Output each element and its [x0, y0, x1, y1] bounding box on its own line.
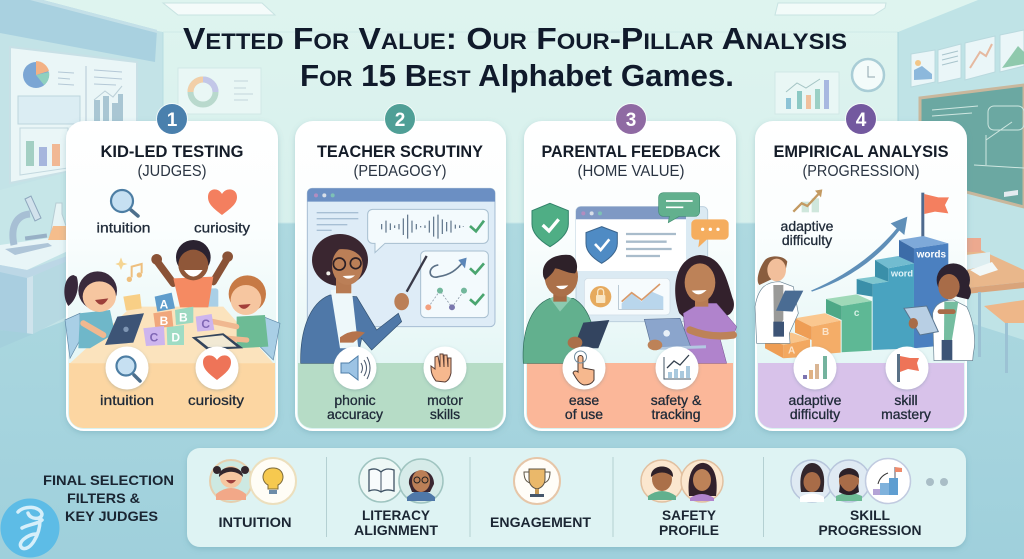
icon: speaker: [334, 346, 376, 390]
counter with microscope and flask: [0, 172, 70, 348]
staircase: B: [822, 327, 829, 338]
title: For 15 Best Alphabet Games.: [300, 58, 734, 93]
label: skill mastery: mastery: [881, 406, 931, 422]
label: intuition bottom: intuition: [100, 392, 154, 408]
scientist left: [755, 256, 803, 343]
speech bubbles: [659, 193, 729, 247]
panel 4: empirical analysis: [755, 103, 975, 430]
filter: safety profile: PROFILE: [659, 522, 719, 538]
mother with laptop: [644, 255, 737, 363]
teacher desk and chair: [966, 238, 1024, 373]
number badge 2: [384, 103, 416, 135]
chalkboard: [920, 85, 1024, 207]
filter: literacy alignment: ALIGNMENT: [354, 522, 438, 538]
colour band 4: [758, 363, 964, 428]
staircase: [765, 236, 948, 358]
final selection label: KEY JUDGES: [65, 508, 158, 524]
icon: magnifier top: [111, 190, 138, 216]
heading 2: TEACHER SCRUTINY: [317, 143, 483, 161]
number badge 2: 2: [395, 110, 405, 131]
label: skill mastery: skill: [894, 392, 918, 408]
centre child: [151, 240, 233, 307]
arrow: [811, 217, 907, 292]
icon: heart bottom: [196, 346, 238, 390]
label: adaptive difficulty top: difficulty: [782, 232, 832, 248]
panel 1: kid-led testing: [64, 103, 280, 430]
filter: intuition: INTUITION: [218, 514, 292, 530]
colour band 1: [69, 363, 275, 428]
heading 3: (HOME VALUE): [578, 163, 684, 180]
heading 3: [542, 143, 721, 180]
filter: safety profile: SAFETY: [662, 507, 717, 523]
filter: safety profile: [641, 460, 723, 538]
icon: pointer hand: [562, 346, 606, 390]
staircase: words: [916, 249, 946, 260]
boy with tablet: [192, 275, 268, 350]
title: [183, 21, 847, 93]
icon: rising chart: [656, 346, 698, 390]
title: Vetted For Value: Our Four-Pillar Analysis: [183, 21, 847, 56]
heading 1: [100, 143, 244, 180]
alphabet blocks: A: [160, 297, 169, 311]
label: motor skills: skills: [430, 406, 460, 422]
label: curiosity top: curiosity: [194, 220, 250, 236]
panel 3: parental feedback: [523, 103, 737, 430]
sparkle and music note: [115, 257, 142, 282]
filter: skill progression: SKILL: [850, 507, 890, 523]
filter: skill progression: [791, 458, 948, 538]
green shield: [532, 203, 568, 247]
number badge 3: [615, 103, 647, 135]
heading 3: PARENTAL FEEDBACK: [542, 143, 721, 161]
heading 4: [774, 143, 948, 180]
staircase: c: [854, 308, 860, 319]
girl with tablet: [64, 271, 144, 348]
whiteboard left: [10, 47, 137, 183]
icon: magnifier bottom: [106, 346, 148, 390]
illustration: kids at a table with blocks: [64, 240, 280, 363]
label: safety and tracking: tracking: [651, 406, 701, 422]
icon: small rising arrow: [793, 189, 822, 212]
progress panel with checks: [421, 251, 488, 318]
dashboard window: [576, 207, 708, 322]
label: ease of use: of use: [565, 406, 603, 422]
final selection label: [43, 472, 174, 524]
filter: skill progression: PROGRESSION: [818, 522, 922, 538]
alphabet blocks: D: [171, 330, 180, 344]
filter: engagement: [490, 458, 591, 530]
alphabet blocks: C: [201, 317, 210, 331]
speech bubble with waveform: [368, 209, 488, 253]
icon: flag: [886, 346, 928, 390]
number badge 1: [156, 103, 188, 135]
father with tablet: [523, 255, 609, 363]
label: phonic accuracy: accuracy: [327, 406, 383, 422]
label: adaptive difficulty bottom: [789, 392, 842, 422]
label: ease of use: ease: [569, 392, 599, 408]
label: motor skills: [427, 392, 463, 422]
label: safety and tracking: safety &: [651, 392, 702, 408]
label: adaptive difficulty top: [781, 218, 834, 248]
heading 2: (PEDAGOGY): [354, 163, 446, 180]
filter: literacy alignment: [354, 458, 443, 538]
alphabet blocks: B: [179, 311, 188, 325]
label: motor skills: motor: [427, 392, 463, 408]
number badge 1: 1: [167, 110, 178, 131]
number badge 4: [845, 103, 877, 135]
number badge 4: 4: [856, 110, 867, 131]
label: phonic accuracy: phonic: [334, 392, 376, 408]
logo: [0, 498, 60, 558]
ceiling light right: [775, 3, 886, 15]
label: phonic accuracy: [327, 392, 383, 422]
illustration: progression staircase with scientists: [755, 193, 975, 361]
label: ease of use: [565, 392, 603, 422]
staircase: A: [788, 345, 795, 356]
label: curiosity bottom: curiosity: [188, 392, 244, 408]
heading 2: [317, 143, 483, 180]
label: skill mastery: [881, 392, 931, 422]
label: intuition top: intuition: [96, 220, 150, 236]
label: adaptive difficulty bottom: adaptive: [789, 392, 842, 408]
icon: hand: [424, 346, 466, 390]
alphabet blocks: [123, 293, 214, 346]
colour band 2: [298, 363, 503, 428]
scientist right: [904, 263, 975, 361]
wall clock: [852, 59, 884, 91]
app window: [307, 188, 495, 327]
icon: heart top: [208, 189, 237, 215]
filter bar: [187, 448, 966, 547]
label: safety and tracking: [651, 392, 702, 422]
colour band 3: [527, 363, 733, 428]
icon: ascending bars: [794, 346, 836, 390]
teacher figure: [301, 234, 427, 363]
heading 1: (JUDGES): [138, 163, 206, 180]
final selection label: FINAL SELECTION: [43, 472, 174, 488]
label: adaptive difficulty top: adaptive: [781, 218, 834, 234]
heading 4: EMPIRICAL ANALYSIS: [774, 143, 948, 161]
heading 1: KID-LED TESTING: [100, 143, 244, 161]
filter: intuition: [210, 458, 296, 530]
poster: bar chart: [775, 72, 839, 114]
framed pictures: [911, 30, 1024, 87]
staircase: word: [890, 269, 913, 279]
ceiling light left: [163, 3, 275, 15]
final selection label: FILTERS &: [67, 490, 140, 506]
number badge 3: 3: [626, 110, 636, 131]
alphabet blocks: C: [150, 330, 159, 344]
illustration: teacher at an app window: [301, 188, 495, 363]
label: adaptive difficulty bottom: difficulty: [790, 406, 840, 422]
alphabet blocks: B: [160, 314, 169, 328]
illustration: parents reviewing a dashboard: [523, 193, 737, 363]
heading 4: (PROGRESSION): [802, 163, 920, 180]
poster: donut chart: [178, 68, 261, 114]
filter: literacy alignment: LITERACY: [362, 507, 431, 523]
filter: engagement: ENGAGEMENT: [490, 514, 591, 530]
flag: [921, 193, 949, 241]
panel 2: teacher scrutiny: [296, 103, 505, 430]
